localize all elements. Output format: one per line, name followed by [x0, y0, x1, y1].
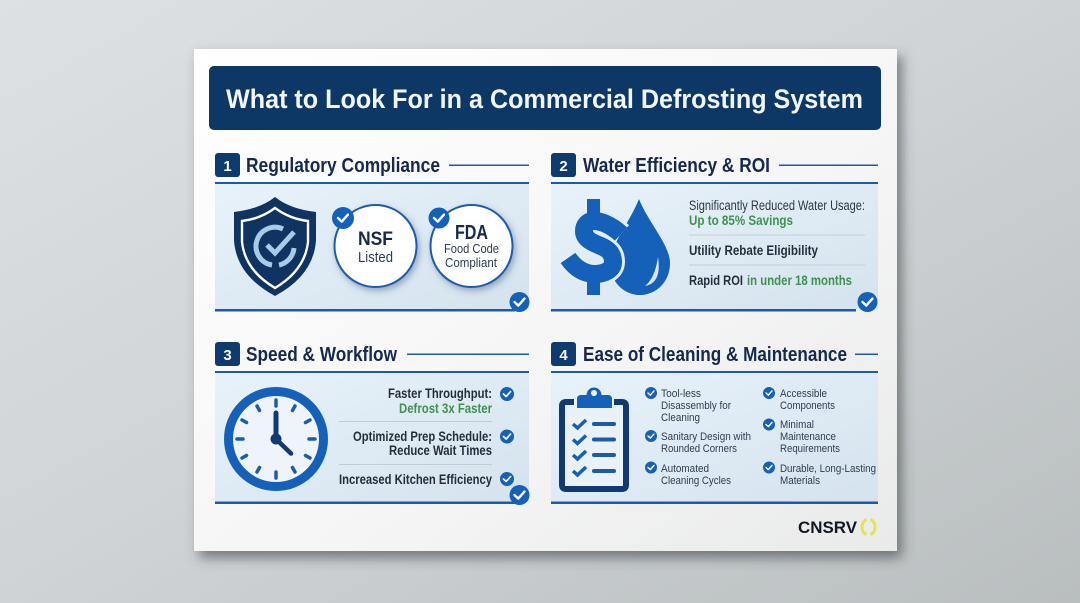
list: left column: Sanitary Design with [661, 431, 751, 443]
text: rapid ROI [689, 273, 852, 288]
list: right column [763, 387, 876, 487]
panel: water efficiency and ROI [551, 153, 878, 312]
text: rapid ROI: Rapid ROI [689, 273, 743, 288]
list: left column: Rounded Corners [661, 443, 737, 455]
title banner [209, 66, 881, 130]
badge: FDA food code compliant [428, 205, 512, 287]
heading: cleaning: Ease of Cleaning & Maintenance [583, 344, 847, 366]
list: right column: Minimal [780, 419, 814, 431]
logo: CNSRV: CNSRV [798, 518, 858, 537]
heading: regulatory compliance: Regulatory Compliance [246, 155, 440, 177]
badge: NSF listed: NSF [358, 229, 393, 250]
icon: shield [234, 197, 316, 296]
heading: water efficiency: 2 [559, 158, 568, 175]
text: prep schedule [353, 429, 514, 458]
list: right column: Requirements [780, 443, 840, 455]
corner check [510, 292, 530, 312]
list: left column: Cleaning Cycles [661, 475, 731, 487]
list: right column: Durable, Long-Lasting [780, 463, 876, 475]
panel: cleaning and maintenance [551, 342, 878, 504]
text: faster throughput [388, 386, 514, 416]
list: left column: Cleaning [661, 412, 700, 424]
text: water usage: Up to 85% Savings [689, 213, 793, 228]
list: left column: Disassembly for [661, 400, 731, 412]
list: left column: Tool-less [661, 388, 701, 400]
text: prep schedule: Reduce Wait Times [389, 443, 492, 458]
heading: speed: Speed & Workflow [246, 344, 397, 366]
heading: cleaning [551, 342, 878, 374]
badge: NSF listed: Listed [358, 250, 393, 266]
text: faster throughput: Defrost 3x Faster [399, 401, 493, 416]
heading: regulatory compliance: 1 [223, 158, 232, 175]
text: rebate: Utility Rebate Eligibility [689, 243, 818, 258]
text: rapid ROI: in under 18 months [747, 273, 852, 288]
list: right column: Materials [780, 475, 820, 487]
panel: speed and workflow [215, 342, 530, 505]
list: left column: Automated [661, 463, 709, 475]
heading: water efficiency [551, 153, 878, 184]
heading: cleaning: 4 [559, 347, 568, 364]
corner check [510, 485, 530, 505]
heading: water efficiency: Water Efficiency & ROI [583, 155, 770, 177]
heading: regulatory compliance [215, 153, 529, 184]
text: prep schedule: Optimized Prep Schedule: [353, 429, 492, 444]
heading: speed: 3 [223, 347, 232, 364]
list: left column [645, 387, 751, 487]
list: right column: Components [780, 400, 835, 412]
badge: FDA food code compliant: Compliant [445, 255, 497, 270]
icon: clock [228, 392, 324, 486]
badge: NSF listed [332, 205, 416, 287]
corner check [858, 292, 878, 312]
list: right column: Maintenance [780, 431, 836, 443]
text: water usage: Significantly Reduced Water Usage: [689, 198, 865, 213]
icon: clipboard [562, 388, 626, 489]
heading: speed [215, 342, 529, 374]
paper card [194, 49, 897, 551]
badge: FDA food code compliant: FDA [455, 222, 488, 244]
badge: FDA food code compliant: Food Code [444, 241, 499, 256]
text: faster throughput: Faster Throughput: [388, 386, 492, 401]
panel: regulatory compliance [215, 153, 530, 312]
title banner: What to Look For in a Commercial Defrosting System [226, 84, 863, 114]
text: kitchen efficiency: Increased Kitchen Efficiency [339, 472, 492, 487]
icon: dollar and water drop [568, 199, 670, 295]
list: right column: Accessible [780, 388, 827, 400]
text: water usage [689, 198, 865, 228]
